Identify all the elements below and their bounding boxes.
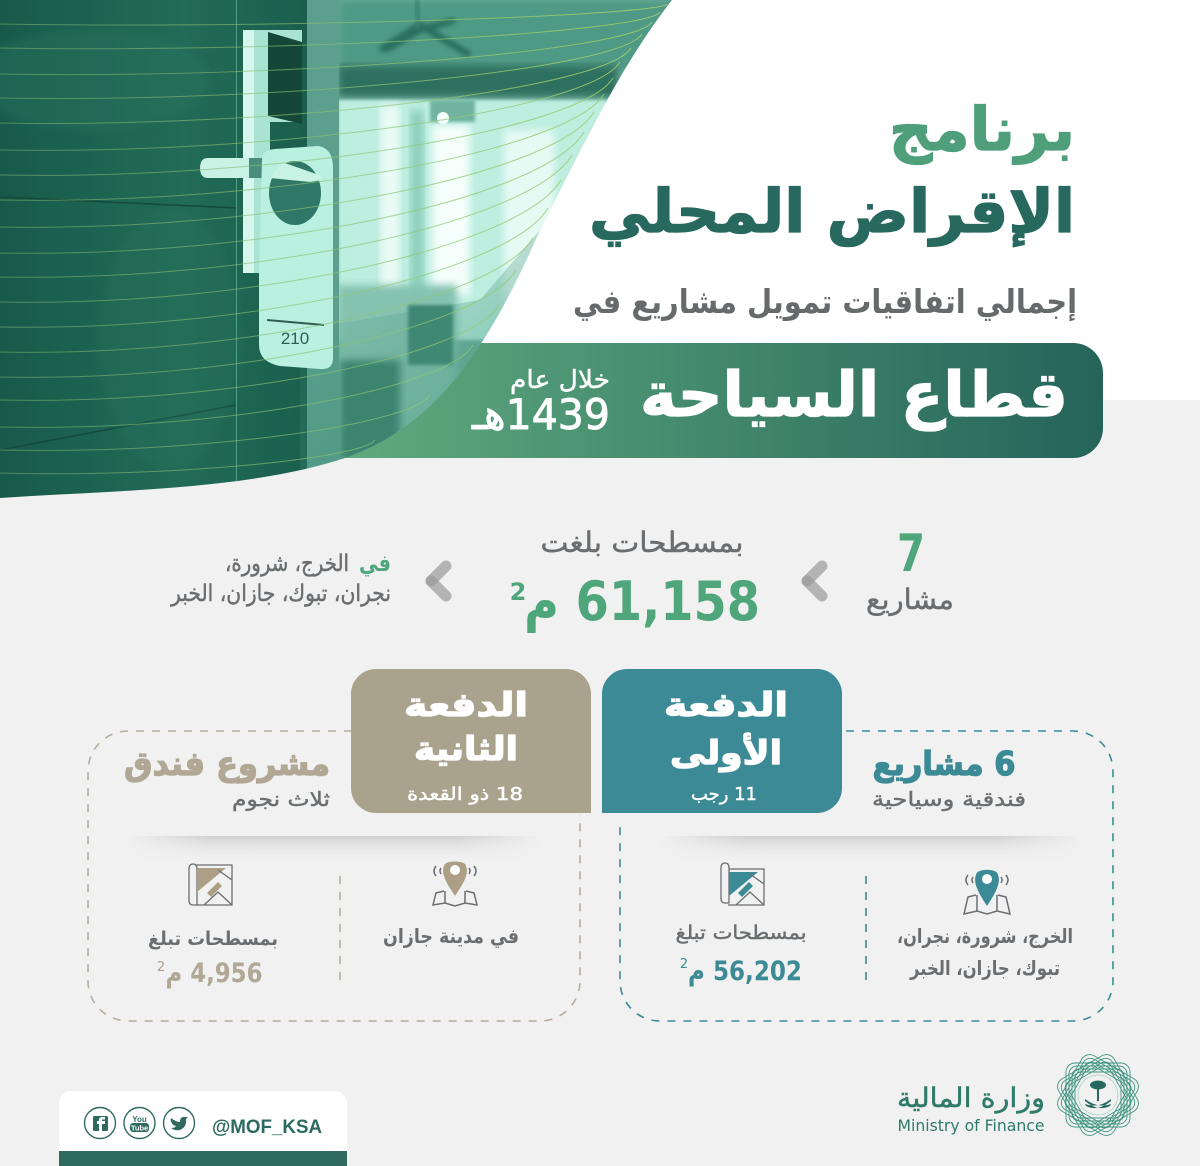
- icon: youtube: Tube: [131, 1124, 148, 1132]
- subtitle: إجمالي اتفاقيات تمويل مشاريع في: [573, 282, 1077, 322]
- stat: total area: 61,158 م: [524, 570, 760, 633]
- panel heading: فندقية وسياحية: [872, 787, 1026, 811]
- batch tab: [351, 669, 591, 813]
- room number: 210: [281, 329, 309, 348]
- area value: 2: [157, 960, 165, 975]
- icon: twitter: [164, 1108, 194, 1138]
- location text: الخرج، شرورة، نجران،: [897, 924, 1073, 948]
- stat: locations: نجران، تبوك، جازان، الخبر: [170, 581, 391, 607]
- ministry logo: Ministry of Finance: [898, 1116, 1044, 1135]
- column divider: [865, 876, 867, 982]
- batch tab: [602, 669, 842, 813]
- dashed frame: [620, 731, 1113, 1021]
- ministry logo: [897, 1051, 1142, 1139]
- banner year note: 1439هـ: [471, 390, 610, 439]
- door lock plate: [243, 30, 302, 273]
- banner year note: خلال عام: [510, 365, 610, 394]
- batch tab: الأولى: [670, 732, 782, 773]
- stat: projects count: [866, 524, 954, 616]
- room behind the door: [300, 0, 678, 500]
- rosette emblem: [1054, 1051, 1142, 1139]
- batch tab: الثانية: [414, 729, 518, 768]
- curved line pattern: [0, 4, 667, 474]
- location text: في مدينة جازان: [383, 924, 519, 949]
- area value: 4,956 م: [166, 958, 262, 989]
- icon: map pin: [964, 870, 1010, 914]
- banner heading: قطاع السياحة: [640, 358, 1068, 431]
- column divider: [339, 876, 341, 982]
- panel heading: 6 مشاريع: [872, 744, 1016, 784]
- icon: youtube: You: [132, 1115, 147, 1124]
- title: [589, 95, 1075, 247]
- icon: site plan: [189, 864, 232, 905]
- dashed frame: [88, 731, 580, 1021]
- panel heading: ثلاث نجوم: [232, 787, 330, 811]
- panel heading: [124, 744, 330, 811]
- stat: total area: [510, 526, 760, 633]
- title: الإقراض المحلي: [589, 177, 1075, 247]
- batch tab: الدفعة: [664, 685, 788, 724]
- panel: second batch: [88, 669, 591, 1021]
- stat: locations: الخرج، شرورة،: [225, 551, 349, 577]
- shadow divider: [680, 836, 1060, 850]
- icon: youtube: [124, 1108, 155, 1138]
- panel heading: مشروع فندق: [124, 744, 330, 784]
- arrow: [431, 566, 446, 596]
- panel: first batch: [602, 669, 1113, 1021]
- arrow: [807, 566, 822, 596]
- icon: facebook: [84, 1108, 116, 1138]
- hotel door photo: [0, 0, 678, 500]
- location text: تبوك، جازان، الخبر: [909, 956, 1060, 980]
- panel heading: [872, 744, 1026, 811]
- stat: locations: [170, 551, 391, 607]
- icon: map pin: [433, 862, 477, 906]
- title: برنامج: [889, 95, 1075, 165]
- area text: بمسطحات تبلغ: [148, 928, 278, 950]
- shadow divider: [147, 836, 520, 850]
- stat: locations: في: [359, 551, 391, 577]
- door: [0, 0, 307, 500]
- handle: @MOF_KSA: [212, 1117, 322, 1138]
- palm and swords: [1085, 1080, 1111, 1108]
- door handle: [200, 158, 249, 178]
- batch tab: 11 رجب: [691, 784, 757, 805]
- area value: 2: [680, 957, 688, 972]
- stat: projects count: مشاريع: [866, 583, 954, 616]
- area value: 56,202 م: [688, 956, 802, 987]
- stat: total area: 2: [510, 578, 526, 606]
- stat: projects count: 7: [897, 524, 925, 584]
- stat: total area: بمسطحات بلغت: [540, 526, 744, 559]
- social footer card: [59, 1091, 347, 1166]
- banner year note: [471, 365, 610, 439]
- batch tab: 18 ذو القعدة: [407, 784, 523, 805]
- location text: [897, 924, 1073, 980]
- icon: site plan: [721, 863, 764, 905]
- title banner pill: [300, 343, 1103, 458]
- area text: بمسطحات تبلغ: [676, 922, 806, 944]
- ministry name: وزارة المالية: [897, 1083, 1045, 1114]
- door hanger tag: [259, 146, 333, 369]
- batch tab: الدفعة: [404, 685, 528, 724]
